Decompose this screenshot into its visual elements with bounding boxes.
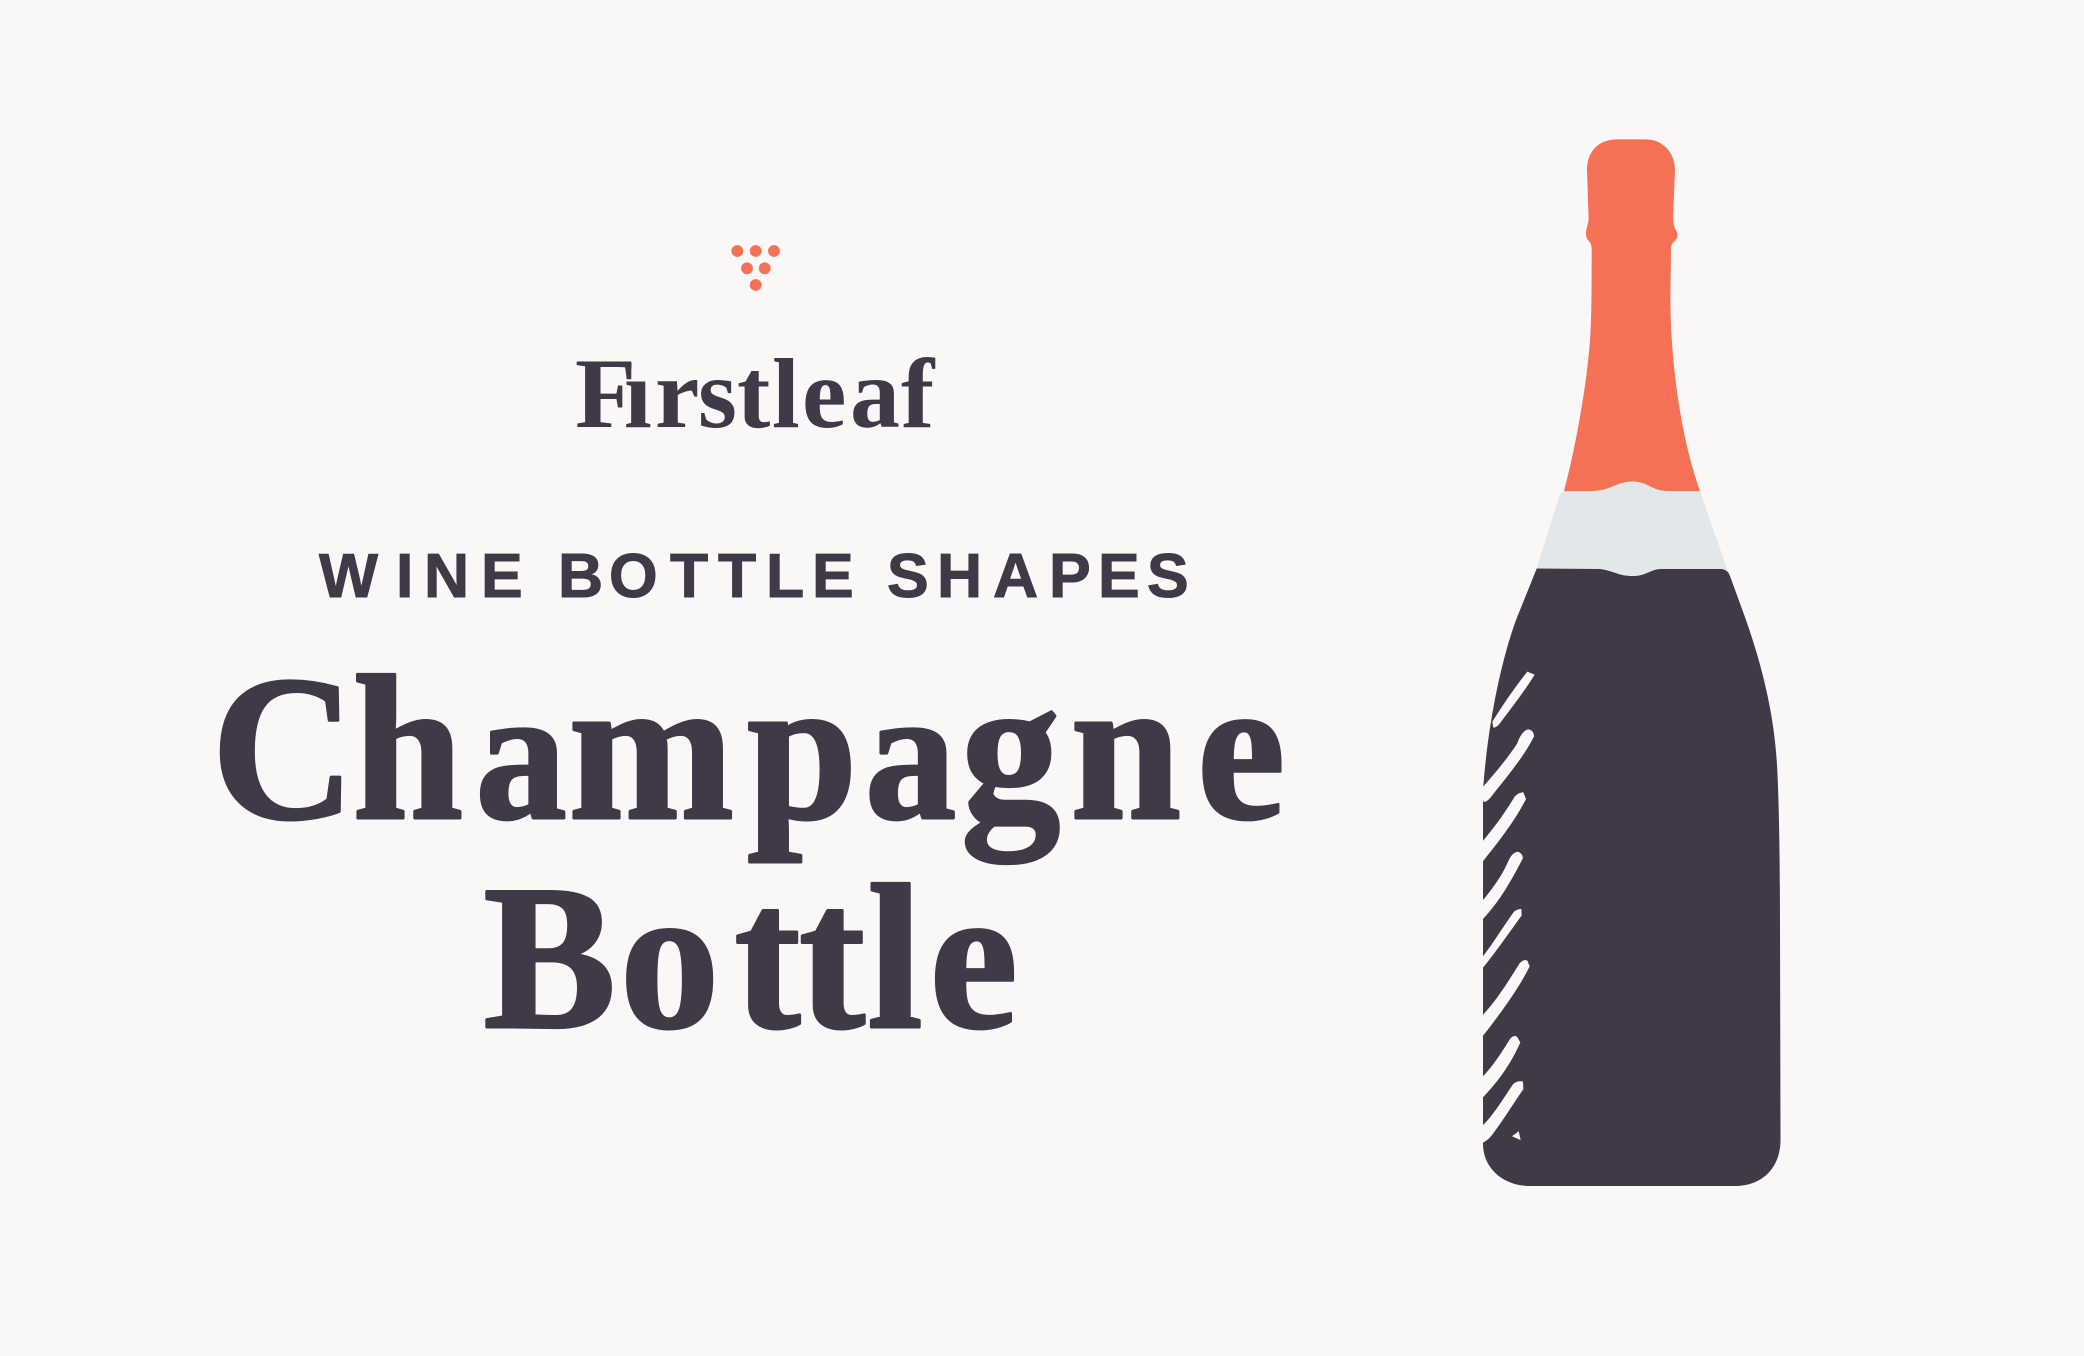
title line 1: Champagne (211, 633, 1285, 864)
title line 2: Bottle (483, 842, 1018, 1072)
logo wordmark: Firstleaf: Firstleaf (575, 338, 936, 449)
subtitle: wine bottle shapes: WINE BOTTLE SHAPES (0, 541, 1189, 611)
illustration: champagne bottle (1482, 139, 1780, 1186)
icon: grape cluster logo mark (731, 245, 780, 291)
bottle shoulder band (1537, 482, 1727, 576)
title: Champagne Bottle (211, 633, 1285, 1072)
bottle body (1483, 568, 1780, 1186)
bottle label hatch marks (1482, 672, 1535, 1143)
bottle neck foil (1564, 139, 1700, 491)
